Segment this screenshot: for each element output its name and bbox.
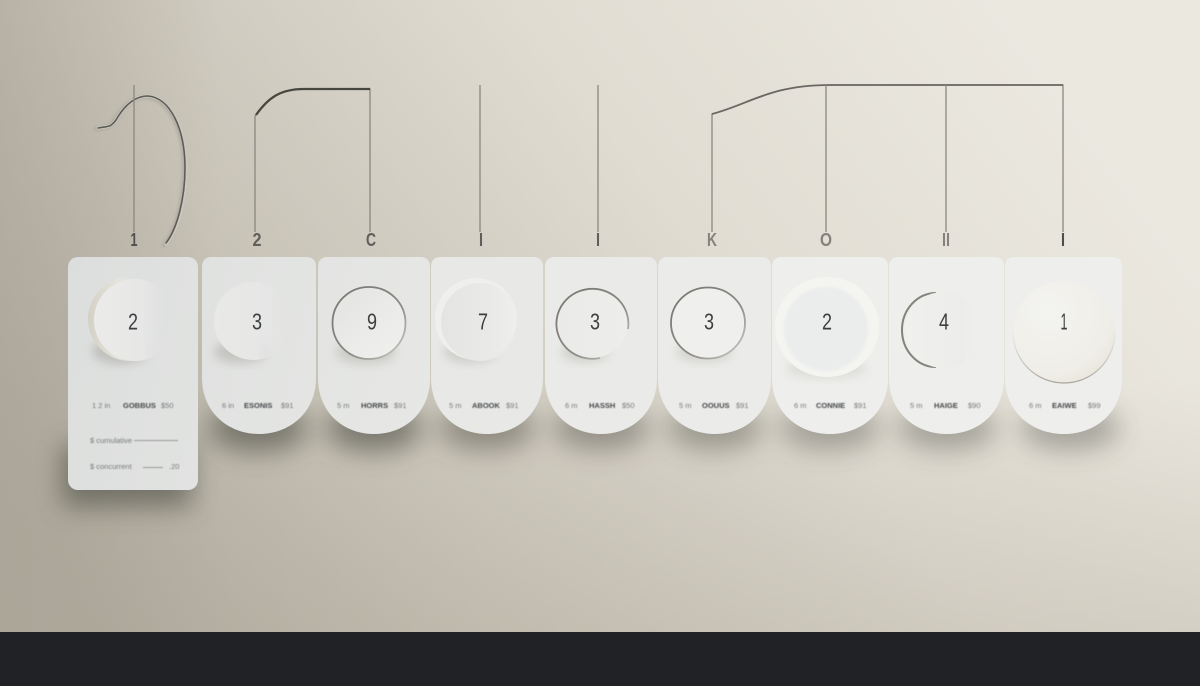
top labels: C — [366, 230, 376, 250]
dial 7: 7 — [478, 308, 488, 334]
panel: card 7 — [772, 257, 888, 434]
label row — [222, 401, 294, 410]
wire: bracket linking markers 2 and C — [255, 89, 370, 232]
top labels: I — [1061, 230, 1065, 250]
label row — [910, 401, 981, 410]
label row: $91 — [394, 401, 407, 410]
label row: HAIGE — [934, 401, 958, 410]
wire: long bracket linking K, O, II and I — [712, 85, 1063, 232]
label row — [565, 401, 635, 410]
top labels: II — [942, 230, 950, 250]
dial 3: 3 — [590, 308, 600, 334]
top labels: 1 — [130, 230, 138, 250]
connector wires and top labels — [96, 85, 1065, 250]
dial 2 — [88, 277, 176, 364]
dial 3 — [556, 288, 628, 362]
detail row 1 — [90, 436, 178, 445]
dial 1: 1 — [1060, 308, 1068, 334]
label row: $99 — [1088, 401, 1101, 410]
label row: $91 — [854, 401, 867, 410]
label row — [679, 401, 749, 410]
panel: card 4 — [431, 257, 543, 434]
label row: 6 m — [1029, 401, 1042, 410]
detail row 2: $ concurrent — [90, 462, 133, 471]
dial 4 — [902, 292, 981, 368]
panel: card 8 — [889, 257, 1004, 434]
label row — [337, 401, 407, 410]
dial 9 — [332, 287, 406, 364]
detail row 2: .20 — [169, 462, 179, 471]
dial 7 — [435, 278, 519, 363]
panel: card 3 — [318, 257, 430, 434]
label row — [1029, 401, 1101, 410]
label row: 5 m — [910, 401, 923, 410]
dial 2: 2 — [128, 308, 138, 334]
label row: 5 m — [449, 401, 462, 410]
label row: ESONIS — [244, 401, 272, 410]
panel: card 9 — [1005, 257, 1122, 434]
label row: OOUUS — [702, 401, 730, 410]
top labels: O — [820, 230, 832, 250]
dial 1 — [1013, 281, 1115, 383]
top labels: K — [707, 230, 717, 250]
dial 2 — [775, 277, 879, 378]
label row: $50 — [161, 401, 174, 410]
panel: card 2 — [202, 257, 316, 434]
label row: $91 — [281, 401, 294, 410]
wire: looped curve, first marker — [96, 85, 186, 245]
label row: 5 m — [679, 401, 692, 410]
label row: 6 m — [565, 401, 578, 410]
label row: ABOOK — [472, 401, 500, 410]
card shadows — [62, 404, 1120, 507]
label row: $91 — [736, 401, 749, 410]
panel: card 5 — [545, 257, 657, 434]
dial 4: 4 — [939, 308, 949, 334]
dial 3 — [671, 288, 745, 362]
label row: 5 m — [337, 401, 350, 410]
label row: 1 2 in — [92, 401, 110, 410]
top labels: I — [596, 230, 600, 250]
label row — [92, 401, 174, 410]
top labels: 2 — [252, 230, 262, 250]
label row: CONNIE — [816, 401, 845, 410]
wire: marker I — [479, 85, 481, 232]
label row — [794, 401, 867, 410]
label row: $50 — [622, 401, 635, 410]
top labels — [130, 230, 1065, 250]
label row: GOBBUS — [123, 401, 156, 410]
dial 3 — [214, 282, 292, 363]
detail row 2 — [90, 462, 179, 471]
label row: 6 m — [794, 401, 807, 410]
label row: 6 in — [222, 401, 234, 410]
top labels: I — [479, 230, 483, 250]
label row: $91 — [506, 401, 519, 410]
detail row 1: $ cumulative — [90, 436, 132, 445]
dial 2: 2 — [822, 308, 832, 334]
label row: HASSH — [589, 401, 615, 410]
dial 3: 3 — [704, 308, 714, 334]
panel: card 1 — [68, 257, 198, 490]
bottom dark band — [0, 632, 1200, 686]
label row: HORRS — [361, 401, 388, 410]
label row — [449, 401, 519, 410]
wire: marker I second — [597, 85, 599, 232]
label row: EAIWE — [1052, 401, 1077, 410]
dial 9: 9 — [367, 308, 377, 334]
label row: $90 — [968, 401, 981, 410]
dial 3: 3 — [252, 308, 262, 334]
panel: card 6 — [658, 257, 771, 434]
